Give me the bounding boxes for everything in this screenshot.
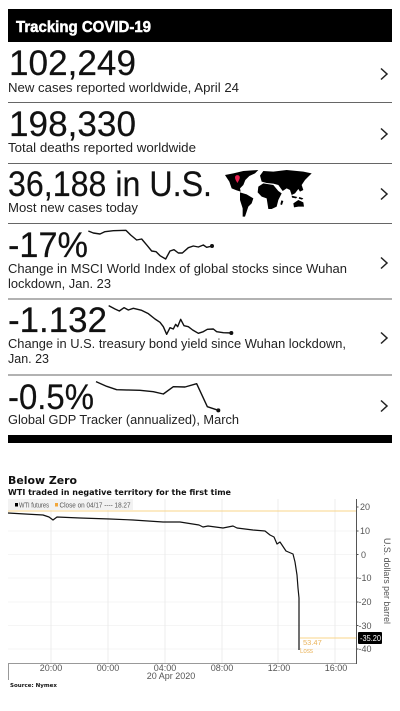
x axis labels: 20 Apr 2020 [147,671,195,681]
row: total deaths: 198,330 [9,105,136,144]
y axis labels: -40 [358,644,372,654]
x axis labels: 00:00 [97,663,119,673]
legend: Close on 04/17 ---- 18.27 [60,502,131,510]
line chart: wti futures [8,499,392,681]
wti price line [8,513,299,650]
sparkline: treasury [109,306,233,335]
title bar: Tracking COVID-19 [16,19,151,36]
icon: red location pin [235,175,240,183]
row: new cases: New cases reported worldwide, April 24 [8,80,239,95]
row: new cases: 102,249 [9,44,136,83]
icon: world map [225,170,312,217]
reference line: close [8,510,356,512]
x axis labels: 20:00 [40,663,62,673]
y axis labels [358,502,372,654]
source: Source: Nymex [10,683,57,689]
x axis labels: 16:00 [325,663,347,673]
row: treasury yield: Change in U.S. treasury bond yield since Wuhan lockdown, [8,336,346,351]
current value tag: -35.20 [360,634,382,643]
row: most new cases: Most new cases today [8,200,138,215]
row: treasury yield: -1.132 [8,301,107,340]
legend: WTI futures [19,502,49,510]
panel: tracking covid-19 [8,9,392,443]
loss annotation: 53.47 [303,638,322,647]
row: gdp tracker [8,378,387,427]
chart heading [8,474,232,497]
loss annotation: Loss [300,648,313,655]
row: most new cases: 36,188 in U.S. [8,165,212,204]
y axis labels: 10 [360,526,370,536]
loss annotation [300,638,322,655]
x axis labels: 04:00 [154,663,176,673]
row: total deaths [8,105,387,155]
row: new cases [8,44,387,95]
y axis title: U.S. dollars per barrel [382,538,392,624]
sparkline: gdp [96,382,220,412]
y axis labels: -30 [358,621,372,631]
legend [8,499,133,510]
y axis labels: 20 [360,502,370,512]
y axis labels: -20 [358,597,372,607]
sparkline: msci [88,230,214,259]
row: msci world index [8,226,387,291]
title bar [8,9,392,42]
y axis labels: 0 [361,550,366,560]
row: gdp tracker: Global GDP Tracker (annualized), March [8,412,239,427]
row: msci world index: lockdown, Jan. 23 [8,276,111,291]
x axis labels: 12:00 [268,663,290,673]
x axis labels [40,663,347,681]
y axis labels: -10 [358,573,372,583]
row: msci world index: -17% [8,226,88,265]
axes [8,499,358,680]
panel: below zero chart [8,474,392,689]
row: treasury yield [8,301,387,366]
chart heading: Below Zero [8,474,77,487]
row: gdp tracker: -0.5% [8,378,94,417]
chart heading: WTI traded in negative territory for the first time [8,488,232,497]
row: treasury yield: Jan. 23 [8,351,49,366]
row: total deaths: Total deaths reported worldwide [8,140,196,155]
row: msci world index: Change in MSCI World Index of global stocks since Wuhan [8,261,347,276]
x axis labels: 08:00 [211,663,233,673]
row: most new cases [8,165,387,217]
reference line: last [300,637,356,639]
current value tag [358,632,382,644]
